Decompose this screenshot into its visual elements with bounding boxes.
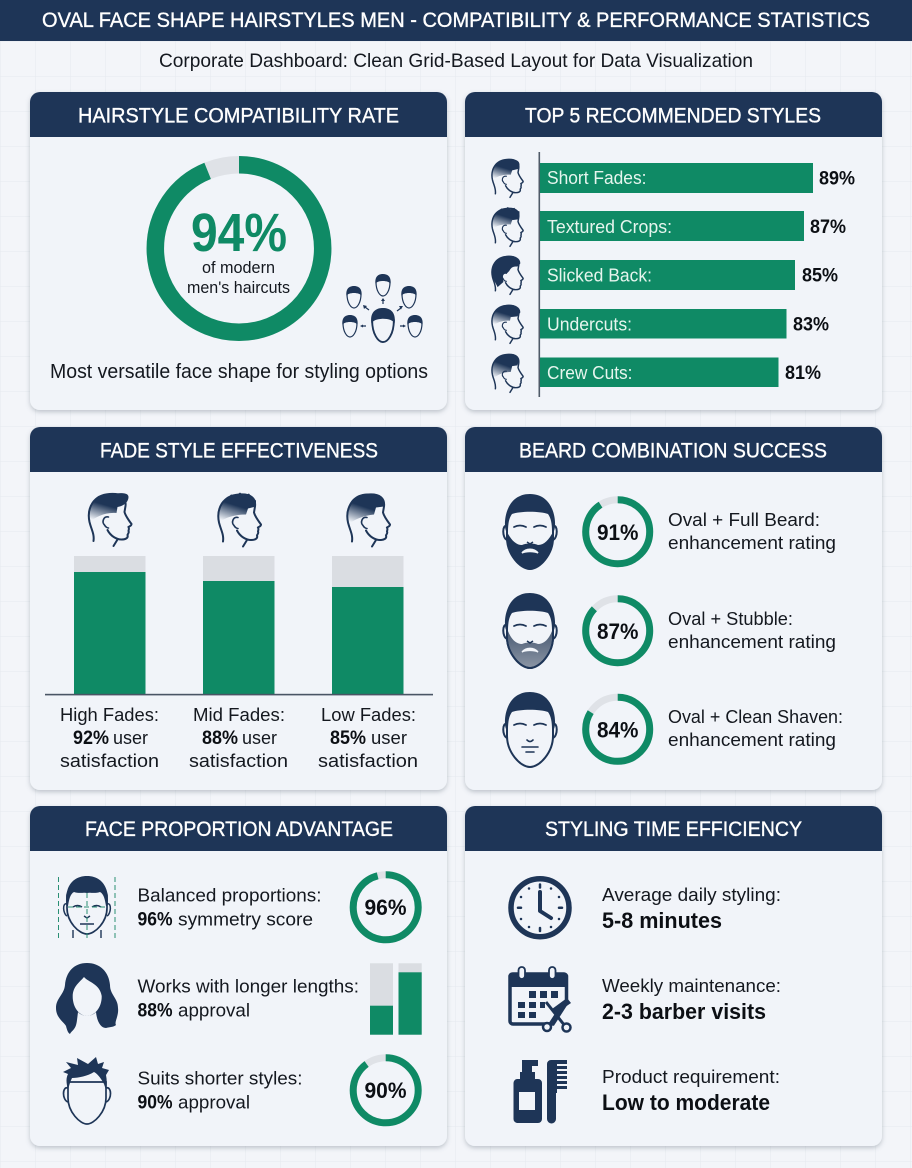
label: stubble: Oval + Stubble: (668, 608, 793, 629)
donut: 96 percent (353, 875, 418, 940)
text: weekly maintenance: 2-3 barber visits (602, 999, 766, 1024)
label: low fades: Low Fades: (321, 704, 416, 725)
bar: undercuts: Undercuts: (547, 314, 632, 334)
donut: 84 percent: 84% (597, 718, 638, 742)
bar: short fades: 89% (819, 168, 855, 190)
label: mid fades (189, 704, 288, 771)
label: stubble (668, 608, 836, 652)
donut chart: 94 percent: of modern (202, 259, 275, 277)
icon: long wavy hair (56, 963, 118, 1034)
bar: short fades: Short Fades: (547, 167, 646, 188)
label: high fades: 92% (73, 727, 109, 749)
panel: beard combination success (465, 427, 882, 790)
icon: high fade head (89, 493, 132, 546)
donut chart: 94 percent: 94% (191, 203, 287, 263)
panel header: face proportion (30, 806, 447, 851)
label: clean shaven: enhancement rating (668, 729, 836, 750)
donut: 91 percent: 91% (597, 520, 638, 545)
panel header: top 5: TOP 5 RECOMMENDED STYLES (525, 104, 821, 128)
panel header: styling time (465, 806, 882, 851)
donut: 90 percent: 90% (364, 1078, 406, 1103)
donut: 84 percent (586, 697, 650, 761)
icon: spiky short hair (63, 1057, 110, 1124)
panel header: top 5 (465, 92, 882, 137)
caption: Most versatile face shape for styling options (50, 361, 428, 383)
panel header: hairstyle compatibility (30, 92, 447, 137)
subtitle: Corporate Dashboard: Clean Grid-Based Layout for Data Visualization (159, 50, 753, 72)
label: mid fades: Mid Fades: (193, 704, 285, 725)
chart baseline (45, 694, 433, 695)
donut: 96 percent: 96% (364, 895, 406, 920)
text: longer lengths: 88% (138, 1000, 172, 1022)
bars: length approval (370, 963, 422, 1035)
label: high fades: user (113, 727, 148, 748)
panel: fade style effectiveness (30, 427, 447, 790)
icon: short fade head (492, 159, 523, 197)
icon: textured crop head (492, 207, 523, 246)
bar: textured crops: 87% (810, 216, 846, 238)
label: low fades: user (371, 727, 407, 748)
panel header: face proportion: FACE PROPORTION ADVANTAGE (85, 818, 393, 841)
panel: hairstyle compatibility rate (30, 92, 447, 410)
icon: product bottle and comb (513, 1060, 567, 1124)
icon: mid fade head (218, 492, 261, 546)
text: weekly maintenance (602, 975, 781, 1024)
text: daily styling: Average daily styling: (602, 884, 781, 905)
text: balanced proportions: symmetry score (178, 908, 313, 930)
label: mid fades: 88% (202, 727, 238, 749)
label: low fades (318, 704, 418, 771)
bar: textured crops: Textured Crops: (547, 216, 672, 237)
icon: full beard face (503, 494, 557, 570)
donut: 91 percent (586, 500, 650, 564)
icon: clean shaven face (503, 692, 557, 767)
panel header: fade style (30, 427, 447, 472)
text: longer lengths: Works with longer lengths: (138, 976, 359, 996)
icon: low fade head (347, 494, 390, 546)
panel header: hairstyle compatibility: HAIRSTYLE COMPATIBILITY RATE (78, 104, 399, 128)
label: mid fades: satisfaction (189, 750, 288, 771)
bar: short fades (540, 163, 855, 193)
icon: face shape versatility cluster (342, 274, 423, 342)
bar: crew cuts (540, 358, 821, 387)
title banner (0, 0, 912, 41)
text: shorter styles: 90% (138, 1091, 172, 1113)
text: balanced proportions: Balanced proportions: (138, 884, 322, 906)
label: full beard: enhancement rating (668, 532, 836, 553)
text: product requirement: Low to moderate (602, 1090, 770, 1115)
bar: textured crops (540, 211, 846, 241)
bar: crew cuts: 81% (785, 362, 821, 384)
label: clean shaven: Oval + Clean Shaven: (668, 706, 843, 727)
bar: undercuts (540, 309, 829, 338)
label: stubble: enhancement rating (668, 631, 836, 652)
label: high fades: High Fades: (60, 704, 159, 725)
text: daily styling: 5-8 minutes (602, 908, 722, 933)
donut: 87 percent: 87% (597, 619, 638, 644)
text: longer lengths: approval (178, 1000, 250, 1020)
panel: styling time efficiency (465, 806, 882, 1146)
panel header: beard combination (465, 427, 882, 472)
donut chart: 94 percent (155, 165, 323, 332)
text: balanced proportions: 96% (138, 908, 172, 930)
icon: clock (511, 879, 569, 937)
text: shorter styles: approval (178, 1091, 250, 1112)
text: shorter styles (138, 1067, 302, 1113)
bar: slicked back: Slicked Back: (547, 264, 652, 286)
donut: 87 percent (586, 599, 650, 663)
panel header: beard combination: BEARD COMBINATION SUCCESS (519, 440, 827, 462)
text: shorter styles: Suits shorter styles: (138, 1067, 302, 1088)
panel header: fade style: FADE STYLE EFFECTIVENESS (100, 440, 378, 462)
label: low fades: satisfaction (318, 750, 418, 771)
label: full beard (668, 509, 836, 553)
bar: crew cuts: Crew Cuts: (547, 362, 632, 383)
bar: slicked back (540, 260, 838, 290)
label: low fades: 85% (330, 727, 366, 749)
icon: stubble face (503, 593, 557, 668)
panel: face proportion advantage (30, 806, 447, 1146)
icon: undercut head (492, 305, 523, 343)
text: longer lengths (138, 976, 359, 1022)
label: clean shaven (668, 706, 843, 750)
label: high fades (60, 704, 159, 771)
bar: mid fades 88 percent (203, 556, 274, 694)
title banner: OVAL FACE SHAPE HAIRSTYLES MEN - COMPATIBILITY & PERFORMANCE STATISTICS (42, 9, 870, 32)
label: mid fades: user (242, 727, 277, 748)
text: daily styling (602, 884, 781, 933)
bar: high fades 92 percent (74, 556, 146, 694)
text: balanced proportions (138, 884, 322, 930)
icon: slicked back head (492, 256, 523, 294)
donut: 90 percent (353, 1058, 418, 1123)
text: product requirement (602, 1066, 780, 1115)
icon: symmetric face with guides (58, 876, 115, 941)
donut chart: 94 percent: men's haircuts (187, 279, 290, 297)
text: weekly maintenance: Weekly maintenance: (602, 975, 781, 996)
bar: low fades 85 percent (332, 556, 404, 694)
bar: undercuts: 83% (793, 314, 829, 336)
panel header: styling time: STYLING TIME EFFICIENCY (545, 818, 802, 841)
chart axis (538, 152, 540, 397)
label: full beard: Oval + Full Beard: (668, 509, 820, 530)
label: high fades: satisfaction (60, 750, 159, 771)
bar: slicked back: 85% (802, 264, 838, 286)
panel: top 5 recommended styles (465, 92, 882, 410)
icon: calendar with scissors (509, 967, 571, 1032)
text: product requirement: Product requirement: (602, 1066, 780, 1087)
icon: crew cut head (492, 354, 523, 392)
